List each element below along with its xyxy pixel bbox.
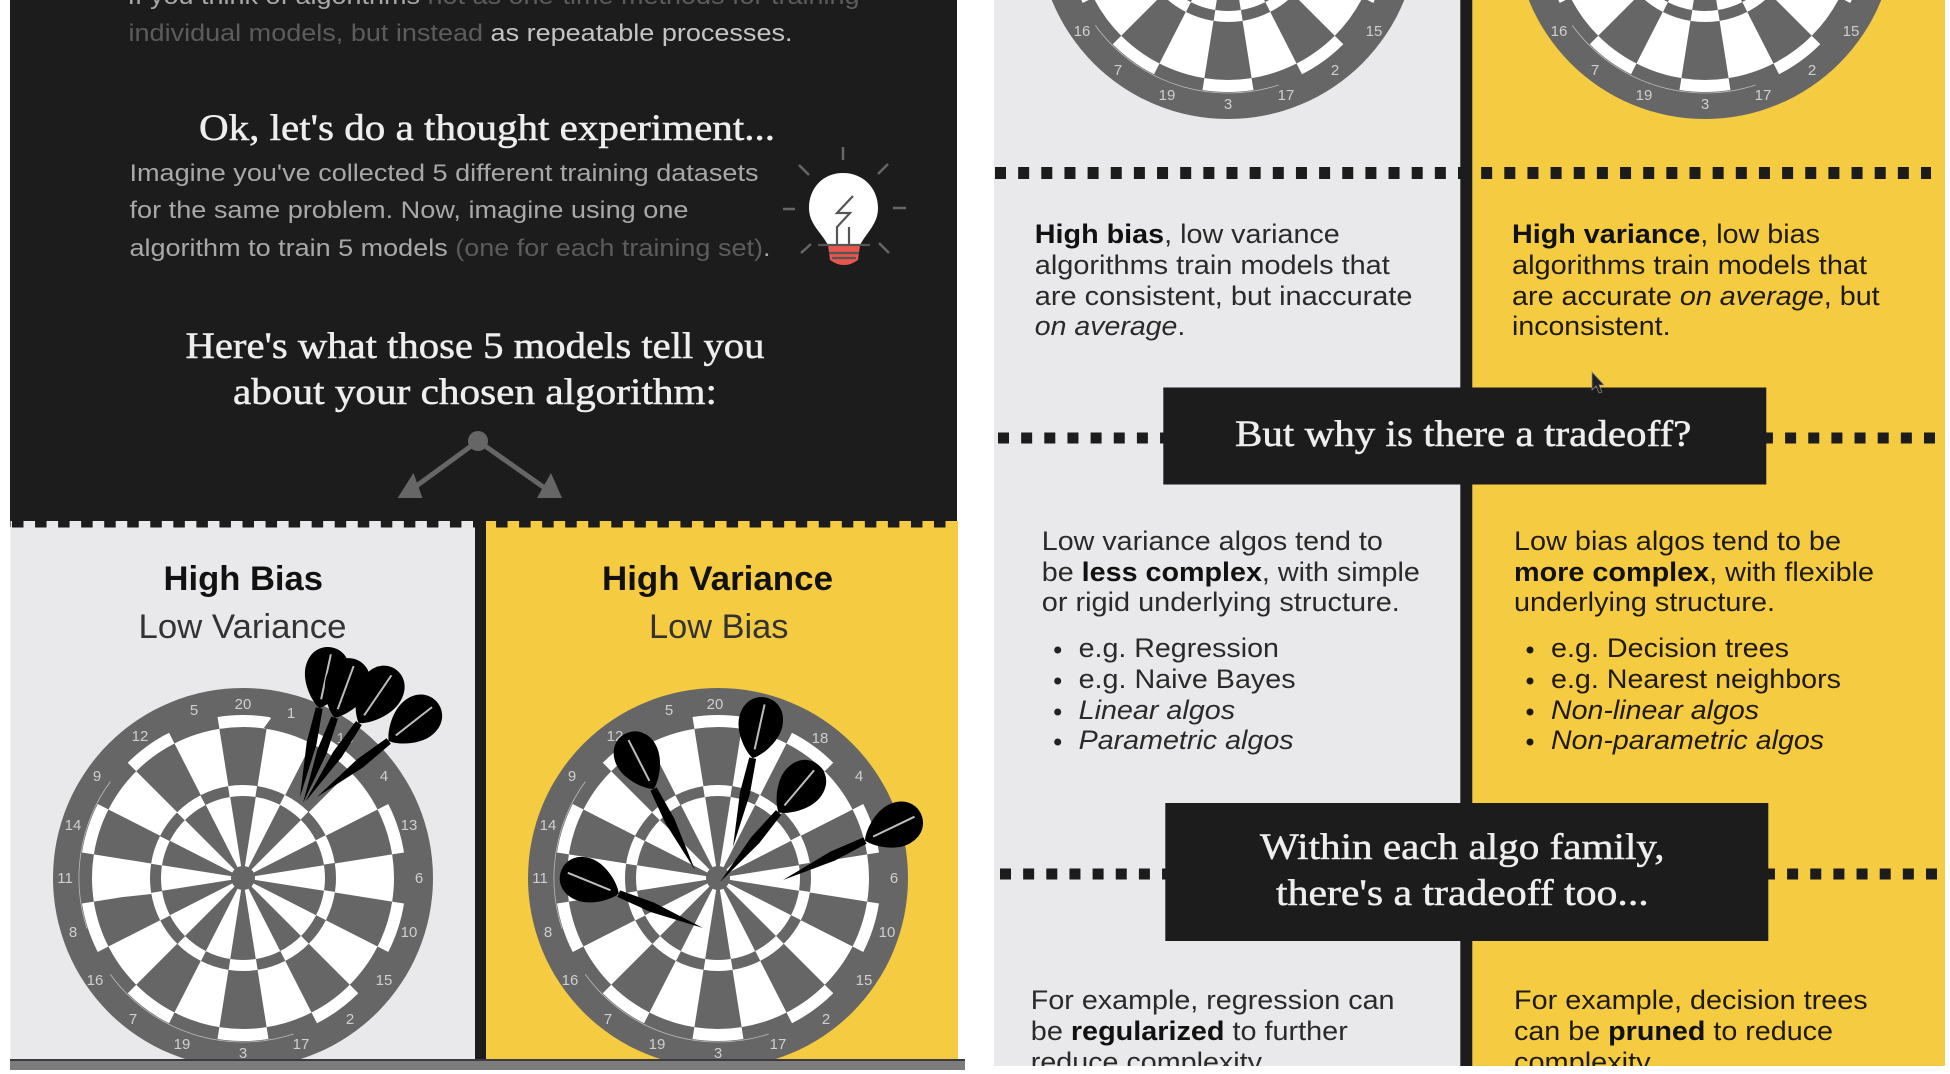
text: low bias algorithms: underlying structure. — [1514, 587, 1775, 617]
dartboard: high variance: 18 — [812, 730, 828, 747]
heading: high variance low bias — [602, 560, 833, 646]
dartboard: bottom of high bias board: 17 — [1278, 87, 1294, 104]
text: high variance description: are accurate on average , but — [1512, 281, 1880, 311]
dartboard: bottom of high variance board — [1515, 0, 1895, 119]
text: regression example: For example, regression can — [1031, 985, 1394, 1015]
text: low variance algorithms: Low variance algos tend to — [1042, 526, 1383, 556]
heading: high bias low variance — [138, 560, 346, 646]
dartboard: high bias: 2 — [346, 1011, 354, 1028]
dartboard: high bias: 6 — [415, 870, 423, 887]
dartboard: high bias: 20 — [235, 696, 251, 713]
callout: within each family — [1165, 803, 1768, 941]
list: low bias examples: e.g. Decision trees — [1551, 633, 1789, 663]
dartboard: high variance: 3 — [714, 1045, 722, 1062]
dartboard: high bias: 10 — [401, 924, 417, 941]
dartboard: bottom of high bias board: 3 — [1224, 96, 1232, 113]
dartboard: bottom of high variance board: 17 — [1755, 87, 1771, 104]
list: low variance examples: Linear algos — [1079, 695, 1235, 725]
panel: high variance — [486, 521, 958, 1061]
thought experiment text: algorithm to train 5 models (one for each training set) . — [130, 235, 771, 262]
dartboard: high bias: 5 — [190, 702, 198, 719]
text: high bias description — [1035, 219, 1412, 341]
dartboard: high variance — [528, 688, 930, 1068]
dartboard: bottom of high bias board: 2 — [1331, 62, 1339, 79]
text: low bias algorithms: more complex , with flexible — [1514, 557, 1874, 587]
callout: within each family: there's a tradeoff too... — [1276, 873, 1649, 914]
icon: branching arrows — [398, 431, 562, 498]
text: low bias algorithms — [1514, 526, 1874, 755]
dartboard: bottom of high bias board — [1038, 0, 1418, 119]
dartboard: bottom of high variance board: 3 — [1701, 96, 1709, 113]
heading: what the models tell you: about your chosen algorithm: — [233, 372, 717, 413]
dartboard: high variance: 5 — [665, 702, 673, 719]
heading: high variance low bias: High Variance — [602, 560, 833, 598]
dartboard: high variance: 11 — [532, 870, 548, 887]
dartboard: bottom of high bias board: 15 — [1366, 23, 1382, 40]
dartboard: bottom of high bias board: 19 — [1159, 87, 1175, 104]
dartboard: high variance: 6 — [890, 870, 898, 887]
darts: scattered around center — [553, 693, 930, 948]
list: low variance examples — [1054, 633, 1296, 755]
text: regression example — [1031, 985, 1394, 1074]
dartboard: high bias: 19 — [174, 1036, 190, 1053]
text: high bias description: are consistent, but inaccurate — [1035, 281, 1412, 311]
list: low bias examples: Non-linear algos — [1551, 695, 1759, 725]
panel: right column high variance — [1472, 0, 1945, 1066]
heading: high bias low variance: High Bias — [164, 560, 323, 598]
dartboard: bottom of high bias board: 16 — [1074, 23, 1090, 40]
text: decision tree example: can be pruned to reduce — [1514, 1016, 1833, 1046]
list: low bias examples: e.g. Nearest neighbors — [1551, 664, 1841, 694]
dartboard: high variance: 8 — [544, 924, 552, 941]
text: low bias algorithms: Low bias algos tend to be — [1514, 526, 1841, 556]
thought experiment text: Imagine you've collected 5 different training datasets — [130, 160, 758, 187]
video scrubber bar — [10, 1059, 965, 1070]
dartboard: high bias: 7 — [129, 1011, 137, 1028]
list: low variance examples: Parametric algos — [1079, 725, 1294, 755]
thought experiment text: for the same problem. Now, imagine using one — [130, 197, 688, 224]
dartboard: high bias: 1 — [287, 705, 295, 722]
intro paragraph: individual models, but instead as repeatable processes. — [128, 20, 792, 47]
panel: right column high bias — [994, 0, 1460, 1066]
icon: mouse cursor — [1592, 372, 1604, 393]
dartboard: high variance: 15 — [856, 972, 872, 989]
heading: what the models tell you: Here's what those 5 models tell you — [186, 326, 764, 367]
text: decision tree example: For example, decision trees — [1514, 985, 1868, 1015]
intro paragraph — [128, 0, 860, 47]
dartboard: high variance: 2 — [822, 1011, 830, 1028]
dartboard: bottom of high variance board: 7 — [1591, 62, 1599, 79]
heading: thought experiment: Ok, let's do a thought experiment... — [199, 108, 775, 149]
dartboard: high bias: 3 — [239, 1045, 247, 1062]
dartboard: high variance: 7 — [604, 1011, 612, 1028]
text: low variance algorithms: or rigid underlying structure. — [1042, 587, 1400, 617]
dartboard: high variance: 16 — [562, 972, 578, 989]
dartboard: high variance: 17 — [770, 1036, 786, 1053]
dartboard: bottom of high bias board: 7 — [1114, 62, 1122, 79]
callout: why a tradeoff — [1163, 388, 1766, 484]
dartboard: high variance: 9 — [568, 768, 576, 785]
text: high variance description: High variance , low bias — [1512, 219, 1820, 249]
list: low variance examples: e.g. Regression — [1079, 633, 1279, 663]
dartboard: bottom of high variance board: 2 — [1808, 62, 1816, 79]
dartboard: high bias — [53, 643, 451, 1068]
list: low variance examples: e.g. Naive Bayes — [1079, 664, 1296, 694]
thought experiment text — [130, 160, 771, 262]
callout: why a tradeoff: But why is there a tradeoff? — [1235, 414, 1691, 455]
list: low bias examples — [1526, 633, 1841, 755]
text: high bias description: on average . — [1035, 311, 1185, 341]
divider — [475, 521, 486, 1061]
icon: light bulb — [783, 147, 906, 265]
dartboard: high bias: 17 — [293, 1036, 309, 1053]
callout: within each family: Within each algo family, — [1260, 827, 1665, 868]
text: high variance description: algorithms train models that — [1512, 250, 1868, 280]
text: high bias description: algorithms train models that — [1035, 250, 1390, 280]
panel: dark intro background — [10, 0, 957, 527]
dartboard: high bias: 13 — [401, 817, 417, 834]
dartboard: high bias: 4 — [380, 768, 388, 785]
dartboard: high variance: 14 — [540, 817, 556, 834]
dartboard: bottom of high variance board: 16 — [1551, 23, 1567, 40]
dartboard: high bias: 18 — [337, 730, 353, 747]
dartboard: high bias: 9 — [93, 768, 101, 785]
divider — [1460, 0, 1472, 1066]
list: low bias examples: Non-parametric algos — [1551, 725, 1824, 755]
dartboard: bottom of high variance board: 19 — [1636, 87, 1652, 104]
text: low variance algorithms — [1042, 526, 1420, 755]
text: low variance algorithms: be less complex , with simple — [1042, 557, 1420, 587]
heading: high variance low bias: Low Bias — [649, 608, 788, 646]
dartboard: high bias: 15 — [376, 972, 392, 989]
dartboard: high bias: 11 — [57, 870, 73, 887]
text: high bias description: High bias , low variance — [1035, 219, 1340, 249]
heading: what the models tell you — [186, 326, 764, 413]
text: regression example: be regularized to further — [1031, 1016, 1348, 1046]
dartboard: high variance: 19 — [649, 1036, 665, 1053]
heading: high bias low variance: Low Variance — [138, 608, 346, 646]
panel: high bias — [10, 521, 476, 1061]
text: decision tree example — [1514, 985, 1868, 1074]
dartboard: high bias: 14 — [65, 817, 81, 834]
darts: clustered off target — [278, 643, 451, 814]
text: high variance description — [1512, 219, 1880, 341]
dartboard: high variance: 20 — [707, 696, 723, 713]
dartboard: high variance: 10 — [879, 924, 895, 941]
dartboard: high bias: 12 — [132, 728, 148, 745]
dartboard: high bias: 8 — [69, 924, 77, 941]
text: high variance description: inconsistent. — [1512, 311, 1670, 341]
dartboard: high variance: 12 — [607, 728, 623, 745]
dartboard: high variance: 4 — [855, 768, 863, 785]
dartboard: bottom of high variance board: 15 — [1843, 23, 1859, 40]
dartboard: high bias: 16 — [87, 972, 103, 989]
